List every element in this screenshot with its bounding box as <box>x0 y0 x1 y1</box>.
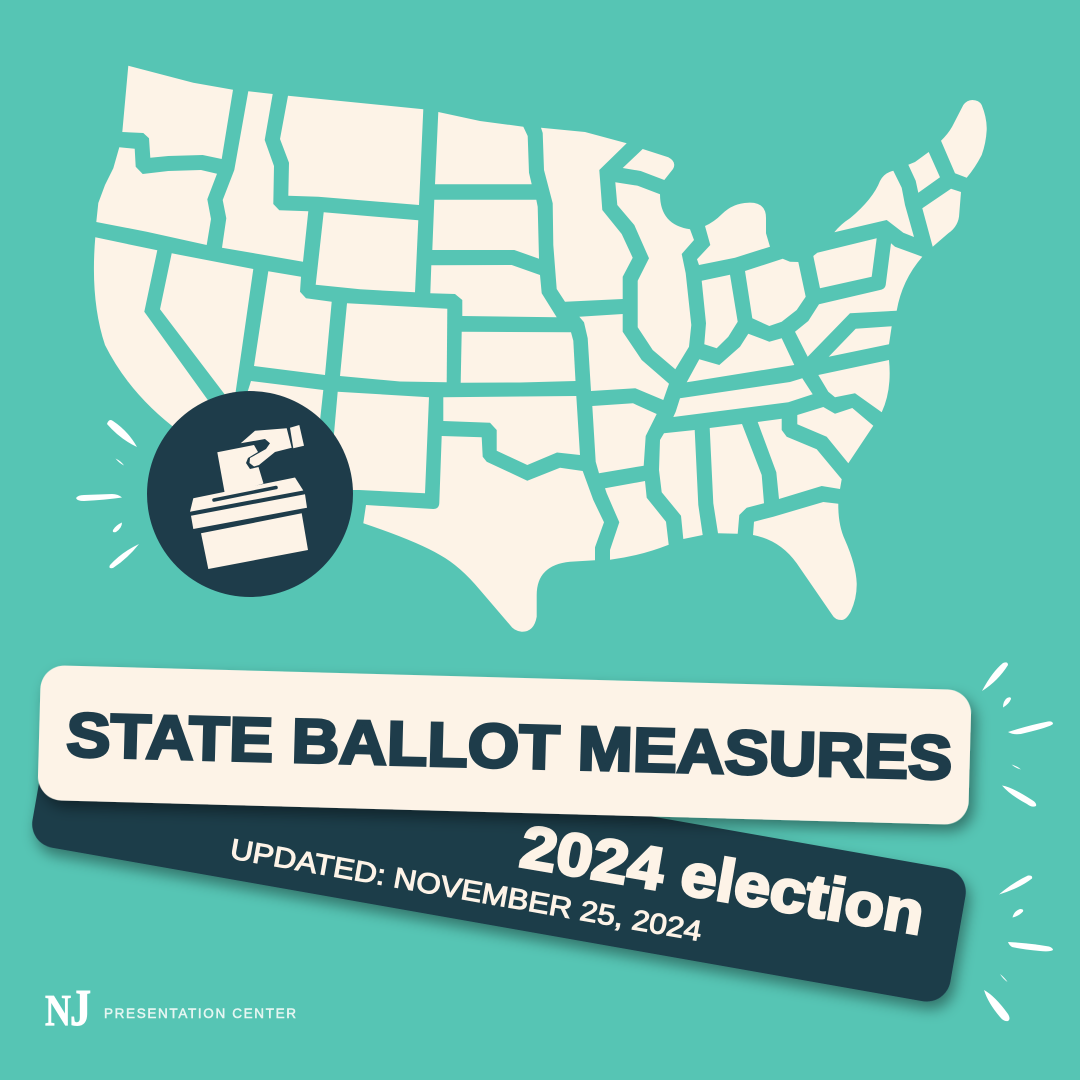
logo: NJ Presentation Center: N <box>45 986 71 1035</box>
logo: NJ Presentation Center: J <box>70 980 91 1037</box>
badge: ballot box circle <box>147 391 353 597</box>
panel: cream title banner <box>37 665 972 825</box>
text: update date: UPDATED: NOVEMBER 25, 2024 <box>228 833 704 948</box>
logo: NJ Presentation Center: PRESENTATION CENTER <box>104 1006 296 1021</box>
sparkles: right of banners <box>982 662 1053 1021</box>
logo: NJ Presentation Center <box>45 980 296 1037</box>
sparkles: left of badge <box>76 420 139 568</box>
title: STATE BALLOT MEASURES <box>66 701 953 793</box>
map: contiguous United States <box>94 66 987 632</box>
subtitle: 2024 election: 2024 election <box>516 813 929 948</box>
icon: ballot box with hand <box>190 425 308 569</box>
panel: dark subtitle banner <box>28 711 970 1005</box>
